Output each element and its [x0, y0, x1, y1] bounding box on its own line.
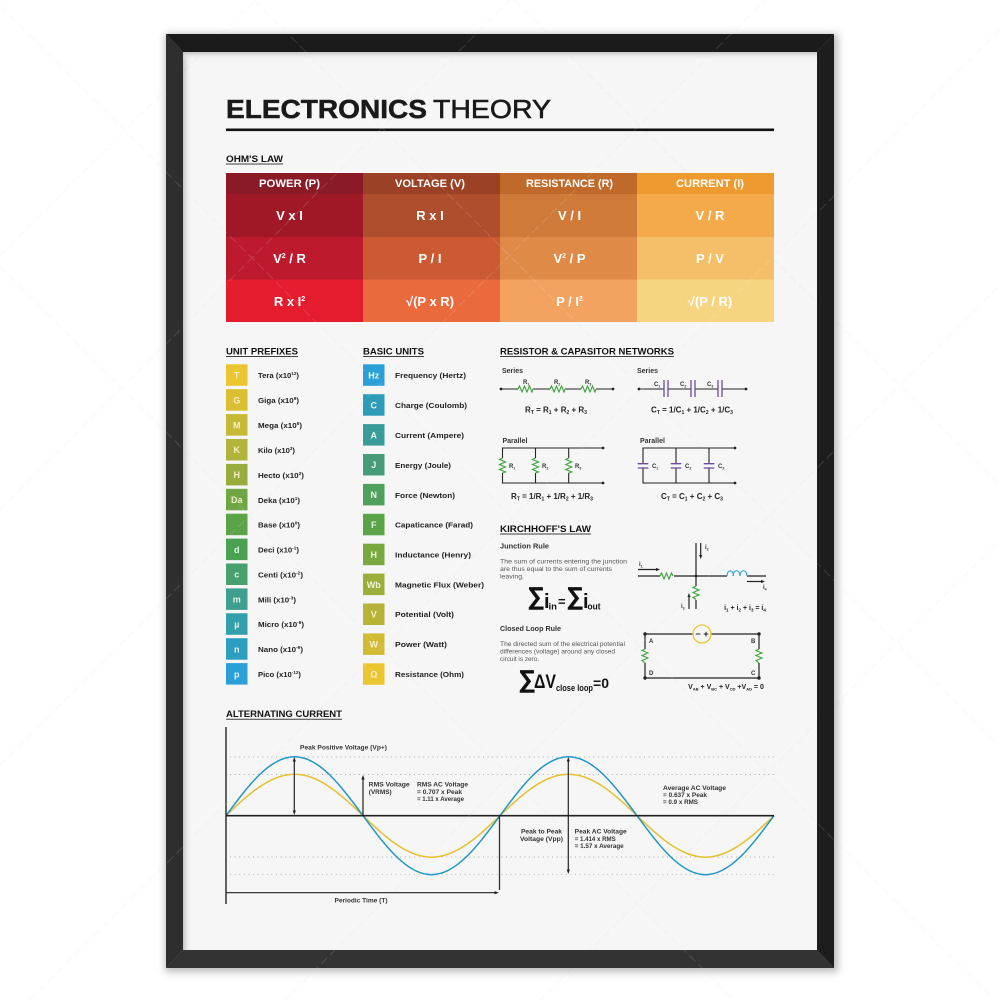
formula: closed loop sum: close loop [556, 683, 593, 693]
diagram: parallel resistors: Parallel [502, 438, 527, 445]
formula: closed loop sum: ΔV [534, 672, 556, 693]
poster frame [166, 34, 834, 968]
text: closed loop rule: Closed Loop Rule [500, 626, 561, 633]
panel: unit prefixes: -9 [296, 645, 301, 650]
panel: Ohm's law table: V [273, 251, 282, 266]
panel: unit prefixes: 2 [299, 471, 302, 476]
diagram: parallel capacitors: 3 [720, 496, 723, 502]
diagram: parallel resistors: R [575, 464, 579, 470]
diagram: series resistors: 3 [584, 410, 587, 416]
label: peak AC voltage [575, 828, 627, 850]
title [226, 96, 774, 131]
panel: unit prefixes: Deka (x10 [258, 496, 293, 505]
panel: Ohm's law table: √(P x R) [406, 294, 454, 309]
diagram: parallel capacitors: 2 [702, 496, 705, 502]
formula: junction sum: i [583, 591, 589, 613]
panel: unit prefixes: ) [299, 421, 302, 430]
diagram: series resistors: R [523, 380, 527, 386]
frame shadow [165, 34, 838, 972]
diagram: parallel capacitors: C [685, 464, 689, 470]
panel: unit prefixes: ) [292, 446, 295, 455]
panel: Ohm's law table: V x I [276, 208, 303, 223]
diagram: parallel resistors: 1 [513, 466, 515, 470]
diagram: parallel resistors: 2 [546, 466, 548, 470]
diagram: series capacitors: + 1/C [709, 406, 730, 414]
diagram: parallel capacitors: = C [670, 492, 685, 501]
panel: unit prefixes: ) [296, 371, 299, 380]
panel: unit prefixes: T [234, 370, 240, 380]
label: RMS AC voltage: = 1.11 x Average [417, 796, 464, 803]
diagram: series capacitors: C [654, 382, 658, 388]
label: peak AC voltage: = 1.57 x Average [575, 843, 624, 850]
panel: Ohm's law table: P / I [419, 251, 441, 266]
panel: basic units: Magnetic Flux (Weber) [395, 580, 485, 590]
label: peak to peak voltage: Peak to Peak [521, 828, 562, 836]
panel: Ohm's law table: CURRENT (I) [676, 178, 744, 190]
formula: junction sum: in [548, 602, 557, 612]
panel: Ohm's law table: V [553, 251, 562, 266]
text: junction rule: are thus equal to the sum of currents [500, 566, 612, 573]
panel: basic units: J [371, 460, 376, 470]
diagram: series capacitors: Series [637, 368, 658, 375]
diagram: closed loop circuit: C [751, 671, 756, 677]
panel: unit prefixes: ) [297, 520, 300, 530]
diagram: parallel capacitors: C [661, 492, 667, 501]
diagram: series resistors: + R [569, 406, 584, 414]
diagram: series capacitors: 1 [681, 410, 684, 416]
diagram: parallel resistors: + 1/R [569, 492, 590, 501]
diagram: series capacitors: T [657, 410, 660, 416]
formula: junction sum: out [588, 602, 601, 612]
diagram: series capacitors: + 1/C [684, 406, 706, 414]
diagram: junction: 4 [763, 608, 766, 612]
diagram: parallel capacitors: 1 [656, 466, 658, 470]
diagram: closed loop circuit: D [649, 671, 654, 677]
diagram: series capacitors: C [651, 406, 657, 414]
diagram: closed loop circuit: V [688, 684, 693, 691]
label: average AC voltage: = 0.637 x Peak [663, 792, 707, 799]
diagram: junction [638, 543, 767, 612]
panel: unit prefixes: -12 [292, 670, 299, 675]
panel: unit prefixes: H [234, 470, 240, 480]
panel: unit prefixes: µ [234, 620, 239, 630]
diagram: parallel capacitors: + C [705, 492, 720, 501]
diagram: parallel capacitors: 1 [685, 496, 688, 502]
label: average AC voltage: Average AC Voltage [663, 785, 726, 792]
label: RMS voltage: RMS Voltage [369, 782, 410, 788]
panel: basic units: C [371, 400, 378, 410]
diagram: parallel resistors: = 1/R [520, 492, 542, 501]
diagram: closed loop circuit: AD [746, 686, 752, 692]
label: average AC voltage [663, 785, 726, 806]
panel: unit prefixes: c [234, 570, 239, 580]
diagram: parallel resistors: 3 [579, 466, 581, 470]
panel: unit prefixes: G [233, 395, 240, 405]
panel: unit prefixes: UNIT PREFIXES [226, 346, 298, 358]
label: periodic time: Periodic Time (T) [334, 898, 388, 904]
diagram: closed loop circuit: +V [735, 684, 747, 691]
diagram: series resistors: 2 [558, 382, 560, 386]
diagram: junction: i [724, 605, 726, 612]
diagram: parallel resistors: R [509, 464, 513, 470]
panel: unit prefixes: Nano (x10 [258, 645, 294, 654]
diagram: series resistors: R [554, 380, 558, 386]
diagram: closed loop circuit: = 0 [752, 684, 764, 691]
panel: unit prefixes: Mega (x10 [258, 421, 295, 430]
panel: unit prefixes: 12 [291, 371, 297, 376]
panel: basic units: Energy (Joule) [395, 461, 451, 470]
panel: unit prefixes: Da [231, 495, 244, 505]
panel: unit prefixes: M [233, 420, 241, 430]
diagram: parallel resistors [500, 438, 604, 502]
diagram: parallel resistors: 1 [541, 496, 544, 502]
panel: unit prefixes: ) [301, 471, 304, 480]
panel: Ohm's law table: R x I [416, 208, 444, 223]
diagram: closed loop circuit: + [703, 629, 709, 639]
text: junction rule [500, 544, 627, 580]
label: RMS AC voltage [417, 782, 468, 803]
diagram: junction: 2 [738, 608, 741, 612]
diagram: parallel capacitors: 3 [722, 466, 724, 470]
diagram: series resistors: 1 [549, 410, 552, 416]
label: peak positive voltage: Peak Positive Voltage (Vp+) [300, 744, 387, 752]
diagram: series capacitors: C [707, 382, 711, 388]
panel: basic units: A [371, 430, 378, 440]
panel: unit prefixes: Tera (x10 [258, 371, 291, 380]
panel: basic units: Power (Watt) [395, 640, 448, 649]
diagram: junction: 2 [707, 548, 709, 552]
panel: Ohm's law table: POWER (P) [259, 178, 320, 190]
chart: sine waves [226, 727, 774, 904]
formula: junction sum: ∑ [528, 583, 545, 610]
panel: Ohm's law table: 2 [562, 253, 566, 260]
panel: basic units: Capaticance (Farad) [395, 520, 473, 530]
heading: Kirchhoff: KIRCHHOFF'S LAW [500, 524, 591, 535]
formula: junction sum: = [558, 594, 566, 609]
diagram: series capacitors: 1 [658, 384, 660, 388]
arrow: RMS voltage [361, 775, 365, 816]
heading: Ohm's law: OHM'S LAW [226, 154, 283, 165]
formula: closed loop sum: ∑ [518, 666, 536, 693]
heading: alternating current: ALTERNATING CURRENT [226, 709, 342, 720]
text: junction rule: The sum of currents entering the junction [500, 558, 627, 566]
diagram: series capacitors: 2 [706, 410, 709, 416]
diagram: series capacitors: 2 [684, 384, 686, 388]
text: closed loop rule: The directed sum of the electrical potential [500, 641, 625, 648]
diagram: series resistors [500, 368, 614, 416]
panel: basic units: H [371, 550, 377, 560]
arrow: periodic time [226, 891, 499, 894]
label: RMS AC voltage: = 0.707 x Peak [417, 789, 462, 796]
panel: unit prefixes: m [233, 595, 241, 605]
panel: unit prefixes: Mili (x10 [258, 596, 288, 604]
diagram: series resistors: 3 [589, 382, 591, 386]
diagram: series resistors: + R [552, 406, 567, 414]
diagram: series resistors: R [585, 380, 589, 386]
diagram: series capacitors: = 1/C [660, 406, 682, 414]
panel: Ohm's law table: / P [566, 251, 586, 266]
panel: unit prefixes: Centi (x10 [258, 570, 294, 580]
diagram: parallel resistors: T [517, 496, 520, 502]
diagram: junction: 4 [765, 588, 767, 592]
panel: unit prefixes: ) [293, 596, 296, 604]
diagram: closed loop circuit: CD [730, 686, 736, 692]
label: peak to peak voltage: Voltage (Vpp) [520, 836, 563, 843]
panel: unit prefixes: ) [297, 496, 300, 505]
panel: unit prefixes: 1 [295, 496, 298, 501]
panel: basic units: Potential (Volt) [395, 610, 455, 619]
diagram: series resistors: 1 [527, 382, 529, 386]
panel: basic units: Inductance (Henry) [395, 550, 472, 560]
formula: closed loop sum: =0 [593, 675, 609, 691]
panel: Ohm's law table: RESISTANCE (R) [526, 178, 613, 190]
panel: basic units: Charge (Coulomb) [395, 401, 468, 410]
panel: unit prefixes: 9 [294, 396, 297, 401]
text: closed loop rule: circuit is zero. [500, 656, 539, 663]
panel: basic units: BASIC UNITS [363, 346, 424, 358]
panel: basic units: Ω [370, 670, 377, 680]
text: junction rule: leaving. [500, 574, 524, 580]
panel: Ohm's law table: √(P / R) [688, 294, 732, 309]
diagram: series resistors: Series [502, 368, 523, 375]
panel: Ohm's law table: 2 [301, 296, 305, 303]
panel: basic units [363, 346, 485, 685]
diagram: junction: 1 [726, 608, 729, 612]
diagram: junction: 3 [751, 608, 754, 612]
panel: unit prefixes: 0 [295, 520, 298, 526]
diagram: closed loop circuit: A [649, 639, 654, 645]
panel: basic units: Wb [367, 580, 381, 590]
panel: unit prefixes: Base (x10 [258, 520, 293, 530]
diagram: junction: i [705, 545, 707, 551]
diagram: series resistors: 2 [566, 410, 569, 416]
panel: Ohm's law table: 2 [579, 296, 583, 303]
diagram: junction: i [681, 604, 683, 610]
label: peak AC voltage: = 1.414 x RMS [575, 836, 616, 843]
diagram: parallel capacitors: Parallel [640, 438, 665, 445]
text: closed loop rule [500, 626, 625, 663]
panel: basic units: V [371, 610, 377, 620]
panel: Ohm's law table: V / I [558, 208, 581, 223]
arrow: peak positive voltage [293, 757, 296, 815]
panel: unit prefixes: Hecto (x10 [258, 471, 296, 480]
diagram: closed loop circuit [642, 625, 764, 692]
diagram: junction: + i [729, 605, 739, 612]
diagram: closed loop circuit: − [695, 629, 701, 639]
diagram: closed loop circuit: BC [711, 686, 717, 692]
poster paper [183, 52, 817, 950]
panel: unit prefixes: ) [301, 620, 304, 629]
label: RMS voltage: (VRMS) [369, 789, 392, 796]
panel: unit prefixes: n [234, 644, 240, 654]
diagram: series resistors: R [525, 406, 531, 414]
formula: junction sum: i [544, 591, 550, 613]
panel: unit prefixes: Giga (x10 [258, 396, 292, 405]
panel: Ohm's law table: P / I [556, 294, 579, 309]
panel: Kirchhoff's law [500, 524, 767, 693]
diagram: series capacitors: 3 [730, 410, 733, 416]
diagram: series resistors: = R [534, 406, 549, 414]
diagram: parallel resistors: 2 [566, 496, 569, 502]
panel: Ohm's law table: V / R [696, 208, 725, 223]
panel: alternating current [226, 709, 774, 904]
panel: Ohm's law table [226, 173, 774, 322]
panel: basic units: N [371, 490, 377, 500]
formula: junction sum [528, 583, 601, 613]
panel: unit prefixes: ) [300, 645, 303, 654]
panel: unit prefixes: Deci (x10 [258, 546, 291, 554]
title: THEORY [433, 96, 551, 124]
panel: unit prefixes: -2 [296, 570, 301, 576]
text: closed loop rule: differences (voltage) around any closed [500, 648, 615, 656]
diagram: series resistors: T [531, 410, 534, 416]
diagram: parallel resistors: + 1/R [544, 492, 566, 501]
panel: basic units: Force (Newton) [395, 491, 455, 500]
panel: unit prefixes: ) [296, 546, 299, 554]
panel: unit prefixes: Pico (x10 [258, 670, 291, 679]
diagram: closed loop circuit: B [751, 639, 756, 645]
panel: Ohm's law table: P / V [696, 251, 724, 266]
panel: basic units: Hz [368, 370, 380, 380]
diagram: junction: 1 [641, 564, 643, 568]
panel: unit prefixes: p [234, 669, 240, 679]
diagram: closed loop circuit: + V [717, 684, 730, 691]
panel: unit prefixes: 6 [297, 421, 300, 426]
label: peak AC voltage: Peak AC Voltage [575, 828, 627, 836]
formula: closed loop sum [518, 666, 609, 693]
diagram: junction: i [639, 562, 641, 568]
panel: unit prefixes: -6 [297, 620, 302, 625]
diagram: series capacitors [637, 368, 747, 416]
diagram: parallel capacitors: 2 [689, 466, 691, 470]
diagram: junction: i [763, 585, 765, 591]
formula: junction sum: ∑ [566, 583, 584, 610]
panel: unit prefixes [226, 346, 304, 685]
panel: basic units: F [371, 520, 377, 530]
diagram: series capacitors: C [680, 382, 684, 388]
diagram: parallel resistors: 3 [590, 496, 593, 502]
diagram: closed loop circuit: AB [693, 686, 699, 692]
diagram: parallel resistors: R [511, 492, 517, 501]
panel: Ohm's law table: / R [286, 251, 307, 266]
panel: unit prefixes: K [234, 445, 241, 455]
diagram: parallel capacitors: + C [688, 492, 703, 501]
panel: unit prefixes: 3 [290, 446, 293, 451]
diagram: junction: + i [741, 605, 751, 612]
panel: Ohm's law table: VOLTAGE (V) [395, 178, 465, 190]
label: RMS voltage [369, 782, 410, 796]
panel: basic units: Current (Ampere) [395, 431, 465, 440]
diagram: parallel capacitors: C [652, 464, 656, 470]
panel: basic units: W [370, 640, 379, 650]
panel: unit prefixes: -1 [292, 546, 297, 550]
diagram: closed loop circuit: + V [699, 684, 712, 691]
panel: unit prefixes: -3 [289, 596, 294, 600]
panel: unit prefixes: d [234, 545, 240, 555]
diagram: parallel resistors: R [542, 464, 546, 470]
diagram: parallel capacitors: T [667, 496, 670, 502]
heading: networks: RESISTOR & CAPASITOR NETWORKS [500, 346, 674, 358]
label: peak to peak voltage [520, 828, 563, 843]
panel: unit prefixes: ) [296, 396, 299, 405]
panel: resistor and capacitor networks [500, 346, 747, 502]
diagram: series capacitors: 3 [711, 384, 713, 388]
panel: unit prefixes: Kilo (x10 [258, 446, 290, 455]
panel: Ohm's law table: R x I [274, 294, 301, 309]
panel: basic units: Resistance (Ohm) [395, 670, 464, 679]
arrow: peak to peak voltage [567, 757, 570, 874]
label: RMS AC voltage: RMS AC Voltage [417, 782, 468, 788]
title: ELECTRONICS [226, 96, 427, 124]
panel: basic units: Frequency (Hertz) [395, 371, 467, 380]
diagram: junction: 3 [683, 606, 685, 610]
panel: unit prefixes: Micro (x10 [258, 620, 296, 629]
diagram: junction: = i [753, 605, 763, 612]
text: junction rule: Junction Rule [500, 544, 549, 550]
label: average AC voltage: = 0.9 x RMS [663, 799, 699, 806]
panel: unit prefixes: ) [298, 670, 301, 679]
diagram: parallel capacitors: C [718, 464, 722, 470]
panel: Ohm's law table: 2 [282, 253, 286, 260]
diagram: parallel capacitors [638, 438, 736, 502]
panel: unit prefixes: ) [300, 570, 303, 580]
